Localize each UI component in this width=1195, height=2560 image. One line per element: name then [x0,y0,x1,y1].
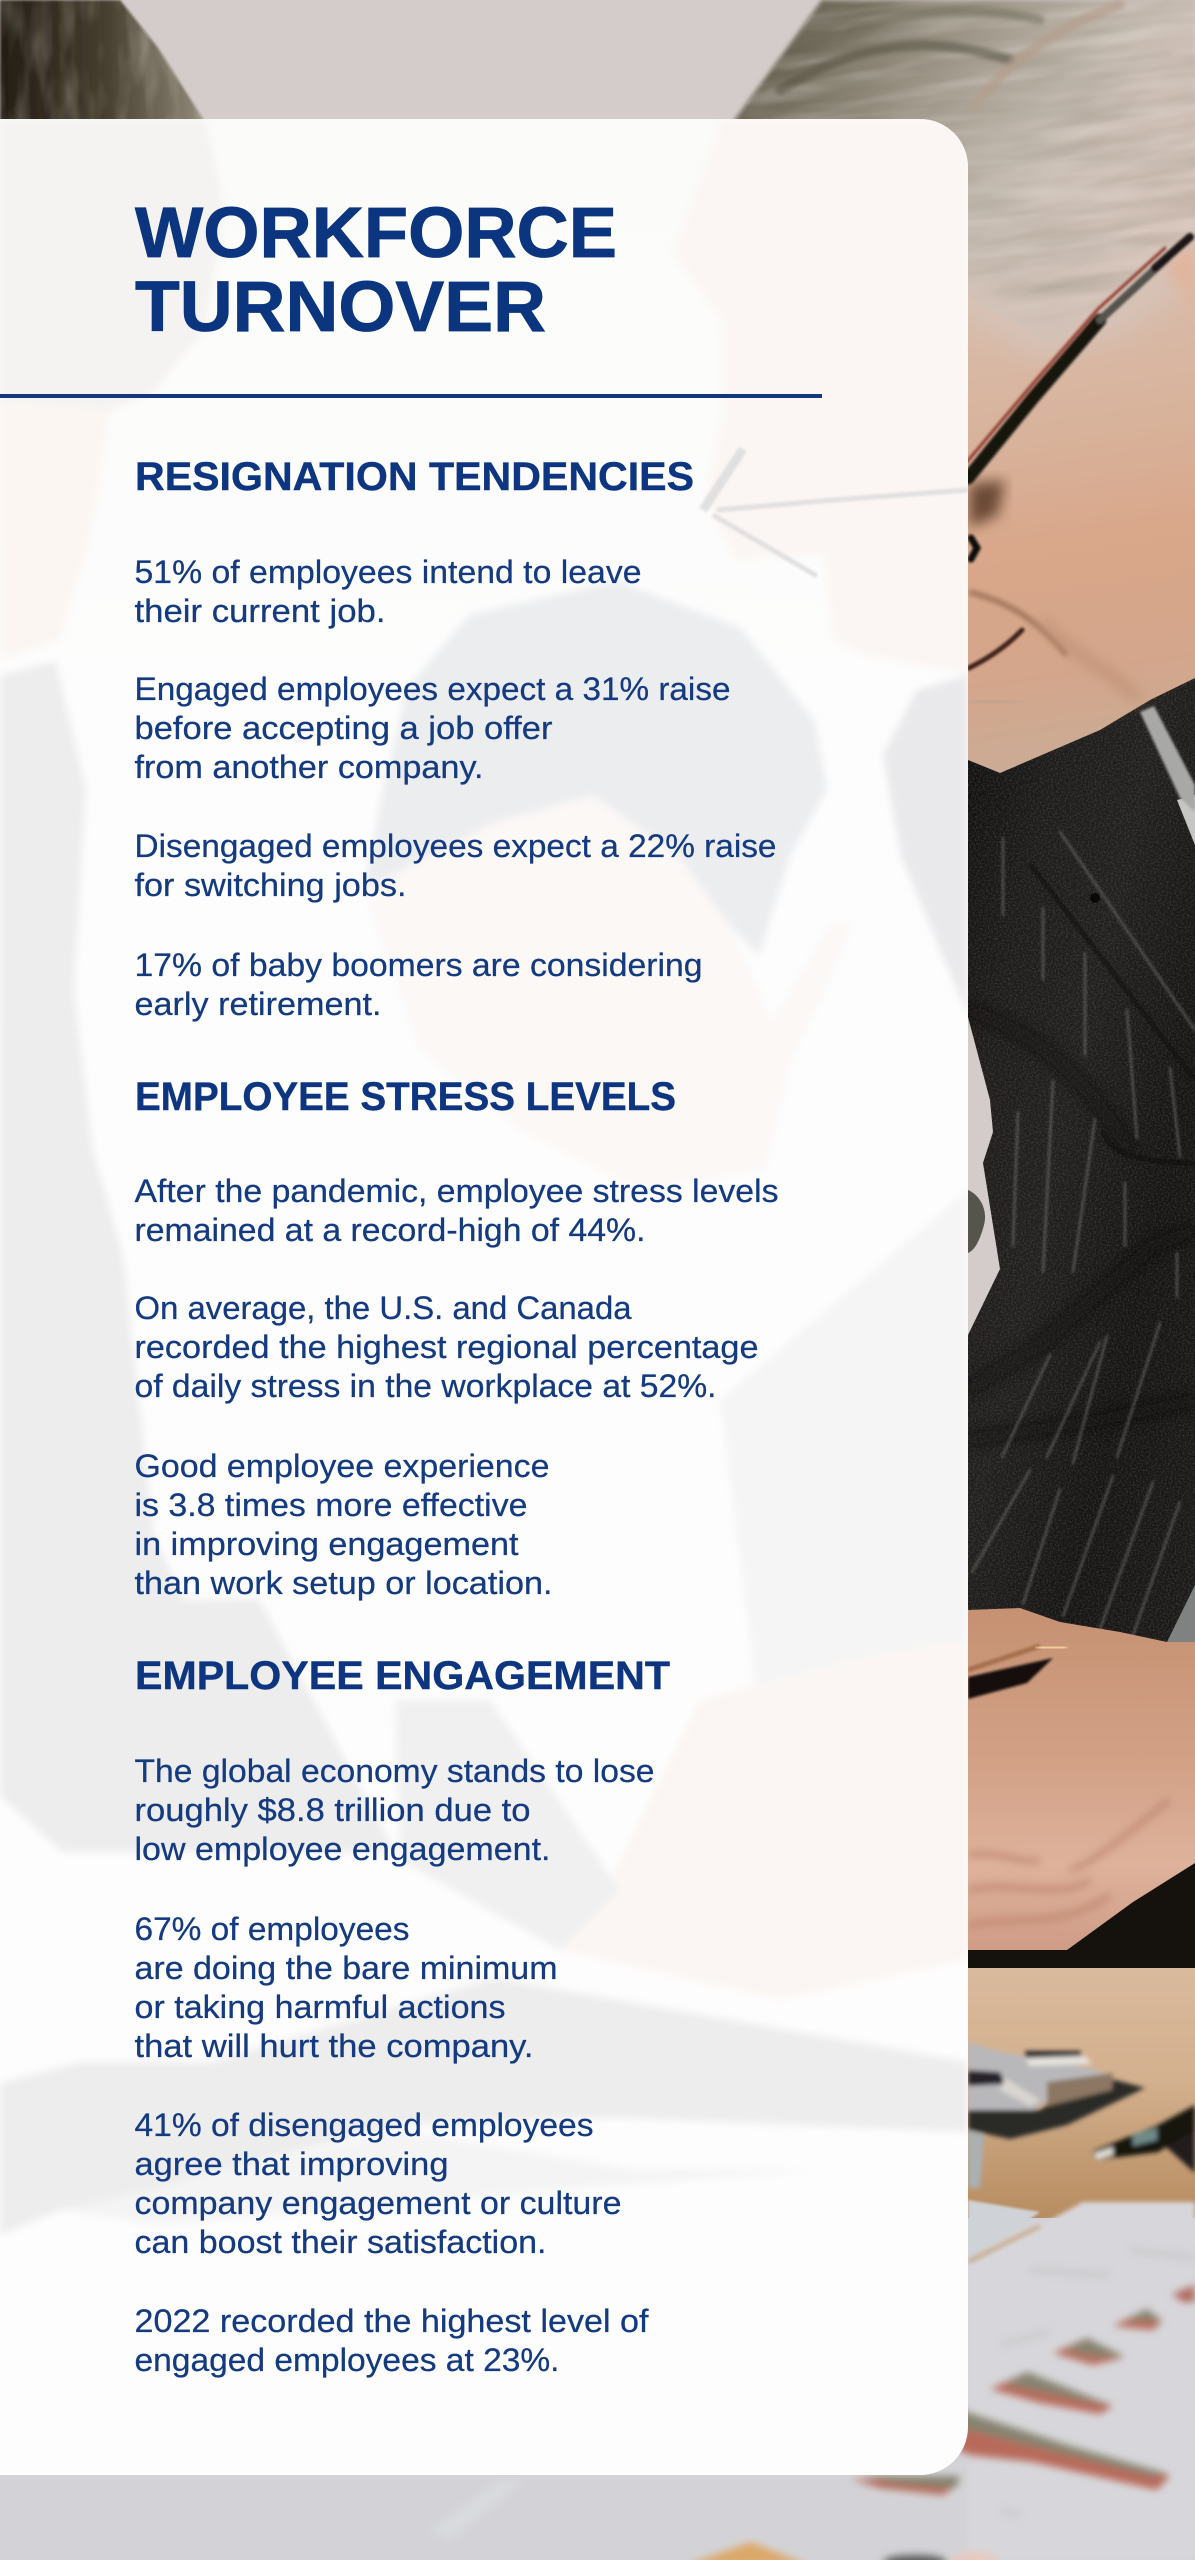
text: employee experience: Good employee experience [134,1448,550,1484]
photo: man jacket with pinstripes [968,660,1195,1645]
panel ghost: photo showing through [0,119,968,2235]
title: WORKFORCE [135,194,617,273]
photo: watch fragment [968,1190,985,1253]
text: 2022 record: 2022 recorded the highest level of [134,2303,650,2339]
text: global economy: low employee engagement. [134,1831,550,1867]
photo: wooden desk [968,1968,1195,2218]
title: TURNOVER [135,268,546,347]
text: disengaged satisfaction: agree that improving [134,2146,448,2182]
text: bare minimum: are doing the bare minimum [134,1950,558,1986]
text: disengaged raise [134,828,776,903]
text: baby boomers: 17% of baby boomers are considering [134,947,702,983]
text: employee experience [134,1448,552,1601]
text: employee experience: in improving engagement [134,1526,518,1562]
text: disengaged raise: for switching jobs. [134,867,406,903]
text: disengaged satisfaction: 41% of disengaged employees [134,2107,594,2143]
text: stress after pandemic: After the pandemic, employee stress levels [134,1173,779,1209]
text: engaged raise: from another company. [134,749,484,785]
text: baby boomers: early retirement. [134,986,382,1022]
panel ghost: glasses [703,449,968,576]
heading: employee stress levels: EMPLOYEE STRESS LEVELS [135,1075,676,1119]
text: global economy: The global economy stands to lose [134,1753,654,1789]
title [135,194,617,347]
photo: hand holding pen [968,1608,1195,1950]
text: intent to leave: their current job. [134,593,386,629]
text: U.S. and Canada stress [134,1290,758,1404]
heading: employee engagement: EMPLOYEE ENGAGEMENT [135,1654,670,1698]
text: disengaged satisfaction: company engagement or culture [134,2185,622,2221]
text: U.S. and Canada stress: On average, the U.S. and Canada [134,1290,632,1326]
photo: dark strip under hand [968,1863,1195,1968]
text: stress after pandemic: remained at a record-high of 44%. [134,1212,646,1248]
translucent white text panel [0,119,968,2475]
text: intent to leave: 51% of employees intend to leave [134,554,642,590]
text: disengaged satisfaction [134,2107,622,2260]
text: bare minimum: or taking harmful actions [134,1989,506,2025]
photo: grey patch lower right [1167,1585,1195,1645]
photo: printed papers with bar chart [850,2200,1195,2560]
text: employee experience: than work setup or location. [134,1565,552,1601]
text: U.S. and Canada stress: recorded the highest regional percentage [134,1329,758,1365]
photo: pen [968,1658,1053,1699]
photo: shirt collar [1140,706,1195,812]
text: global economy: roughly $8.8 trillion due to [134,1792,530,1828]
heading: resignation tendencies: RESIGNATION TENDENCIES [135,455,694,499]
text: disengaged raise: Disengaged employees expect a 22% raise [134,828,776,864]
text: disengaged satisfaction: can boost their satisfaction. [134,2224,546,2260]
text: 2022 record: engaged employees at 23%. [134,2342,560,2378]
text: intent to leave [134,554,642,629]
text: global economy [134,1753,654,1867]
photo: clipboard [968,2042,1145,2188]
photo: man face [955,235,1195,773]
text: stress after pandemic [134,1173,779,1248]
photo: dark hair top left [0,0,210,122]
text: U.S. and Canada stress: of daily stress in the workplace at 52%. [134,1368,716,1404]
text: engaged raise [134,671,730,785]
divider rule [0,394,822,398]
text: engaged raise: before accepting a job offer [134,710,553,746]
text: bare minimum: 67% of employees [134,1911,410,1947]
photo: pen and phone on desk [1093,2105,1195,2173]
photo: man grey hair [732,0,1195,325]
photo: blurred objects along bottom edge [430,2480,999,2560]
text: bare minimum [134,1911,558,2064]
text: engaged raise: Engaged employees expect a 31% raise [134,671,730,707]
text: baby boomers [134,947,702,1022]
text: 2022 record [134,2303,650,2378]
photo: grey background patch at collar [1177,795,1195,845]
photo: glasses temple [966,237,1190,559]
text: bare minimum: that will hurt the company. [134,2028,534,2064]
text: employee experience: is 3.8 times more effective [134,1487,528,1523]
